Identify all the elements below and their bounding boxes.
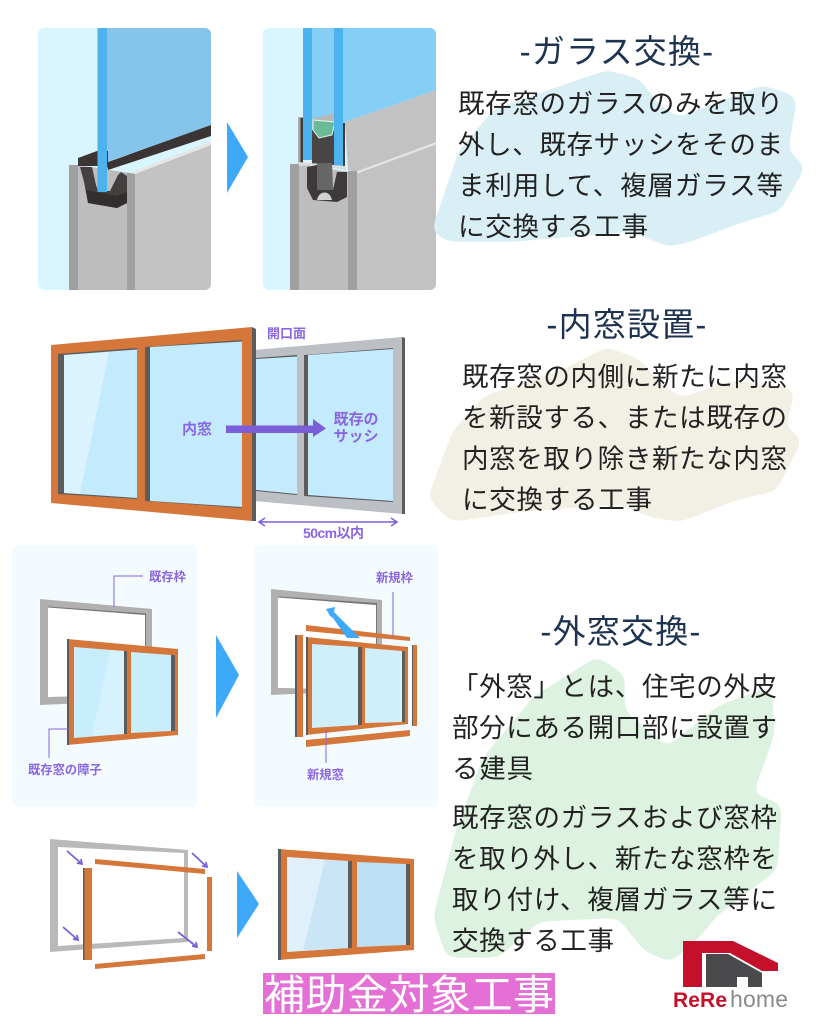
text block: inner window installation: 内窓を取り除き新たな内窓	[462, 444, 787, 474]
heading: outer window replacement: -外窓交換-	[540, 613, 702, 650]
text block: outer window work: を取り外し、新たな窓枠を	[452, 844, 777, 874]
text block: inner window installation	[462, 362, 787, 515]
arrow: inner window to existing sash	[226, 419, 326, 437]
heading: inner window installation: -内窓設置-	[546, 306, 708, 343]
arrow: assembly	[237, 871, 259, 938]
inner window	[51, 327, 256, 521]
panel: outer window after	[254, 545, 439, 807]
callout: existing sash: 既存窓の障子	[28, 762, 102, 777]
callout: new window: 新規窓	[307, 767, 344, 782]
new window	[306, 637, 408, 735]
arrows: corners	[63, 851, 207, 947]
label: 50cm limit: 50cm以内	[303, 525, 364, 541]
callout: new frame: 新規枠	[376, 570, 414, 585]
text block: glass replacement: に交換する工事	[458, 212, 648, 242]
existing sash	[254, 337, 405, 514]
text block: outer window work: 既存窓のガラスおよび窓枠	[452, 803, 777, 833]
text block: glass replacement	[458, 89, 783, 242]
text block: outer window definition: 「外窓」とは、住宅の外皮	[452, 672, 777, 702]
diagram: completed window	[278, 849, 414, 960]
callout: existing frame	[114, 569, 187, 607]
decoration: green paint blob	[438, 662, 777, 957]
callout: new window	[307, 730, 344, 782]
text block: outer window definition	[452, 672, 777, 784]
blue removal arrow	[326, 607, 360, 638]
text block: outer window definition: る建具	[452, 754, 533, 784]
decoration: blue paint blob	[437, 75, 800, 242]
existing sash	[67, 639, 178, 745]
panel: outer window before	[12, 545, 198, 807]
arrow: outer window top	[216, 635, 239, 718]
banner: subsidy eligible work: 補助金対象工事	[264, 972, 554, 1018]
callout: new frame	[376, 570, 414, 637]
dimension arrow	[259, 518, 397, 526]
text block: outer window work	[452, 803, 777, 956]
panel: glass replacement after	[263, 28, 436, 290]
panel: inner window diagram	[51, 326, 405, 541]
text block: outer window work: 取り付け、複層ガラス等に	[452, 885, 777, 915]
arrow: glass replacement	[227, 122, 248, 193]
old frame	[271, 589, 382, 695]
logo: ReRe home: home	[730, 986, 788, 1012]
text block: inner window installation: を新設する、または既存の	[462, 403, 787, 433]
text block: inner window installation: に交換する工事	[462, 485, 652, 515]
text block: inner window installation: 既存窓の内側に新たに内窓	[462, 362, 787, 392]
text block: glass replacement: 既存窓のガラスのみを取り	[458, 89, 783, 119]
new frame pieces	[295, 625, 417, 747]
existing frame	[40, 599, 152, 705]
label: existing sash: サッシ	[333, 428, 379, 445]
callout: existing sash	[28, 729, 102, 777]
text block: outer window definition: 部分にある開口部に設置す	[452, 713, 777, 743]
heading: glass replacement: -ガラス交換-	[520, 33, 714, 70]
label: inner window: 内窓	[182, 420, 212, 438]
text block: outer window work: 交換する工事	[452, 926, 614, 956]
label: existing sash	[333, 410, 379, 445]
callout: existing frame: 既存枠	[149, 569, 187, 584]
label: opening face: 開口面	[267, 326, 306, 341]
panel: glass replacement before	[38, 28, 211, 290]
logo: ReRe home	[673, 941, 788, 1012]
text block: glass replacement: ま利用して、複層ガラス等	[458, 171, 783, 201]
decoration: beige paint blob	[433, 352, 797, 517]
text block: glass replacement: 外し、既存サッシをそのま	[458, 130, 783, 160]
label: existing sash: 既存の	[333, 410, 379, 428]
logo: ReRe home: ReRe	[673, 989, 727, 1012]
diagram: frame assembly	[50, 839, 212, 969]
